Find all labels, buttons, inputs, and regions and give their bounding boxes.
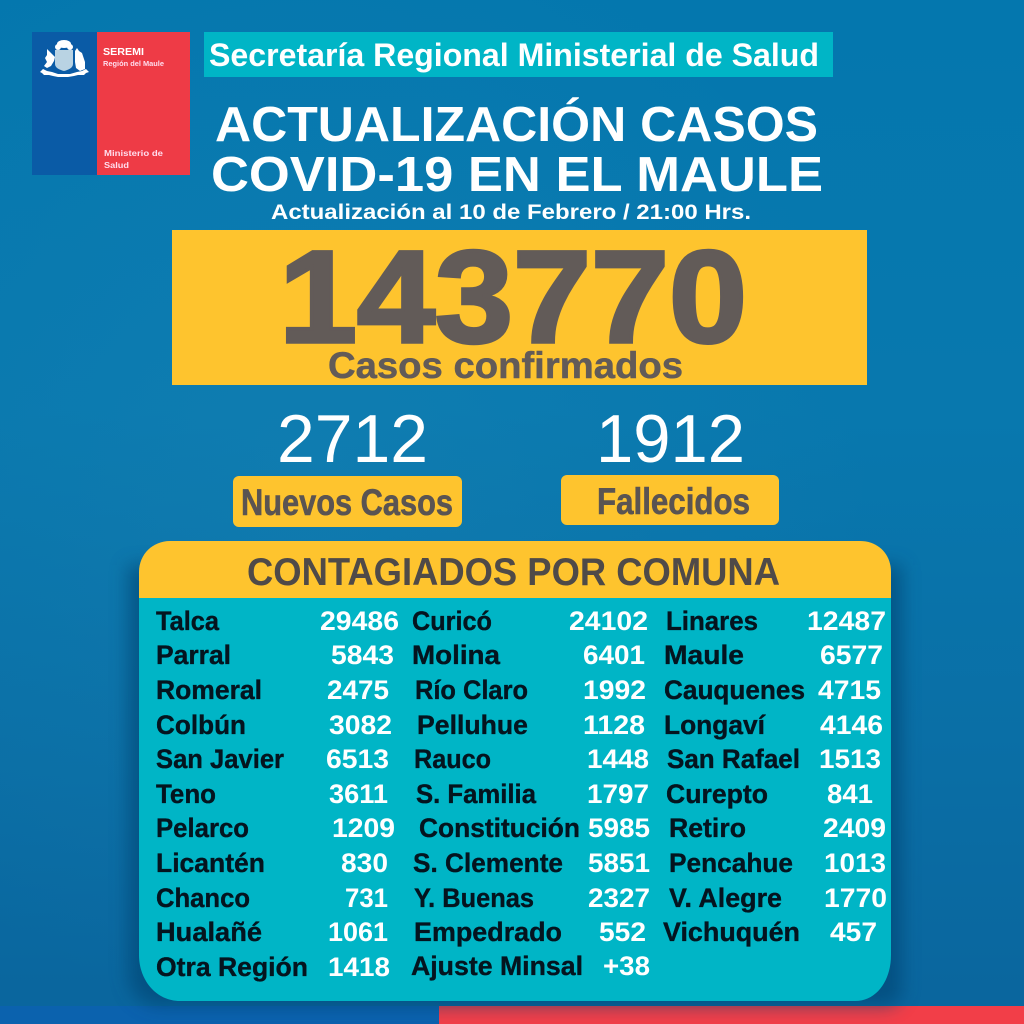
table: case counts: 24102 bbox=[569, 606, 648, 636]
table: commune names: Pelluhue bbox=[417, 710, 528, 740]
table: case counts: 1992 bbox=[583, 675, 646, 705]
heading: contagiados por comuna bbox=[139, 541, 891, 598]
stat: deaths: 1912 bbox=[596, 401, 745, 477]
stat: new cases: Nuevos Casos bbox=[241, 482, 453, 523]
table: case counts: 5843 bbox=[331, 640, 394, 670]
table: case counts: 3611 bbox=[329, 779, 388, 809]
table: case counts: 6577 bbox=[820, 640, 883, 670]
logo: SEREMI Maule bbox=[32, 32, 190, 175]
subtitle: date: Actualización al 10 de Febrero / 21:00 Hrs. bbox=[271, 201, 751, 224]
table: case counts: 830 bbox=[341, 848, 388, 878]
logo: SEREMI Maule: Salud bbox=[104, 160, 129, 170]
table: case counts: 2475 bbox=[327, 675, 389, 705]
table: case counts: 1128 bbox=[583, 710, 645, 740]
table: commune names: Hualañé bbox=[156, 917, 262, 947]
table: commune names: Curepto bbox=[666, 779, 768, 809]
table: commune names: Curicó bbox=[412, 606, 492, 636]
table: case counts: 2327 bbox=[588, 883, 650, 913]
table: case counts: 6401 bbox=[583, 640, 645, 670]
table: case counts: 1448 bbox=[587, 744, 649, 774]
table: commune names: Longaví bbox=[664, 710, 767, 740]
footer stripe bbox=[0, 1006, 1024, 1024]
table: case counts: 3082 bbox=[329, 710, 392, 740]
table: case counts: +38 bbox=[603, 951, 650, 981]
table: commune names: Vichuquén bbox=[663, 917, 800, 947]
table: case counts: 1770 bbox=[824, 883, 887, 913]
table: commune names: Y. Buenas bbox=[414, 883, 534, 913]
panel: contagiados por comuna bbox=[128, 541, 902, 1006]
stat: new cases bbox=[233, 401, 462, 527]
table: case counts: 5851 bbox=[588, 848, 650, 878]
table: case counts: 1013 bbox=[824, 848, 886, 878]
table: commune names: Teno bbox=[156, 779, 216, 809]
stat: deaths: Fallecidos bbox=[597, 481, 750, 522]
table: case counts bbox=[320, 606, 887, 982]
icon: coat of arms bbox=[40, 40, 89, 77]
table: case counts: 1797 bbox=[587, 779, 649, 809]
logo: SEREMI Maule: Ministerio de bbox=[104, 148, 163, 158]
table: commune names: Ajuste Minsal bbox=[411, 951, 583, 981]
table: case counts: 5985 bbox=[588, 813, 650, 843]
table: case counts: 4715 bbox=[818, 675, 881, 705]
table: commune names: S. Clemente bbox=[413, 848, 563, 878]
table: case counts: 457 bbox=[830, 917, 877, 947]
title: ACTUALIZACIÓN CASOS bbox=[215, 97, 818, 152]
table: case counts: 6513 bbox=[326, 744, 389, 774]
table: commune names: Molina bbox=[412, 640, 500, 670]
stat: deaths bbox=[561, 401, 779, 525]
table: commune names: San Rafael bbox=[667, 744, 800, 774]
table: commune names: Romeral bbox=[156, 675, 262, 705]
table: case counts: 552 bbox=[599, 917, 646, 947]
table: case counts: 2409 bbox=[823, 813, 886, 843]
table: commune names: Colbún bbox=[156, 710, 246, 740]
table: case counts: 1209 bbox=[332, 813, 395, 843]
table: commune names: Talca bbox=[156, 606, 219, 636]
table: commune names: Linares bbox=[666, 606, 758, 636]
panel: confirmed cases: 143770 bbox=[279, 223, 747, 370]
table: commune names: Rauco bbox=[414, 744, 491, 774]
title: COVID-19 EN EL MAULE bbox=[211, 148, 823, 202]
table: case counts: 29486 bbox=[320, 606, 399, 636]
panel: confirmed cases: Casos confirmados bbox=[328, 345, 683, 386]
table: commune names: Maule bbox=[664, 640, 744, 670]
heading: contagiados por comuna: CONTAGIADOS POR COMUNA bbox=[247, 551, 780, 594]
table: case counts: 1061 bbox=[328, 917, 388, 947]
table: commune names: Licantén bbox=[156, 848, 265, 878]
logo: SEREMI Maule: SEREMI bbox=[103, 47, 144, 58]
table: commune names: V. Alegre bbox=[669, 883, 782, 913]
table: commune names: Chanco bbox=[156, 883, 250, 913]
table: case counts: 12487 bbox=[807, 606, 886, 636]
table: commune names: Pencahue bbox=[669, 848, 793, 878]
table: commune names: Otra Región bbox=[156, 952, 308, 982]
stat: new cases: 2712 bbox=[277, 401, 428, 477]
table: case counts: 4146 bbox=[820, 710, 883, 740]
table: commune names: Retiro bbox=[669, 813, 746, 843]
banner: secretaría: Secretaría Regional Ministerial de Salud bbox=[209, 37, 819, 73]
table: case counts: 1513 bbox=[819, 744, 881, 774]
table: commune names: Pelarco bbox=[156, 813, 249, 843]
table: case counts: 1418 bbox=[328, 952, 390, 982]
table: case counts: 841 bbox=[827, 779, 873, 809]
table: case counts: 731 bbox=[345, 883, 388, 913]
table: commune names: Constitución bbox=[419, 813, 580, 843]
title bbox=[211, 97, 823, 202]
table: commune names bbox=[156, 606, 805, 982]
table: commune names: Parral bbox=[156, 640, 231, 670]
table: commune names: S. Familia bbox=[416, 779, 536, 809]
logo: SEREMI Maule: Región del Maule bbox=[103, 59, 164, 68]
table: commune names: Cauquenes bbox=[664, 675, 805, 705]
table: commune names: Empedrado bbox=[414, 917, 562, 947]
panel: confirmed cases bbox=[172, 223, 867, 386]
table: commune names: San Javier bbox=[156, 744, 284, 774]
table: commune names: Río Claro bbox=[415, 675, 528, 705]
